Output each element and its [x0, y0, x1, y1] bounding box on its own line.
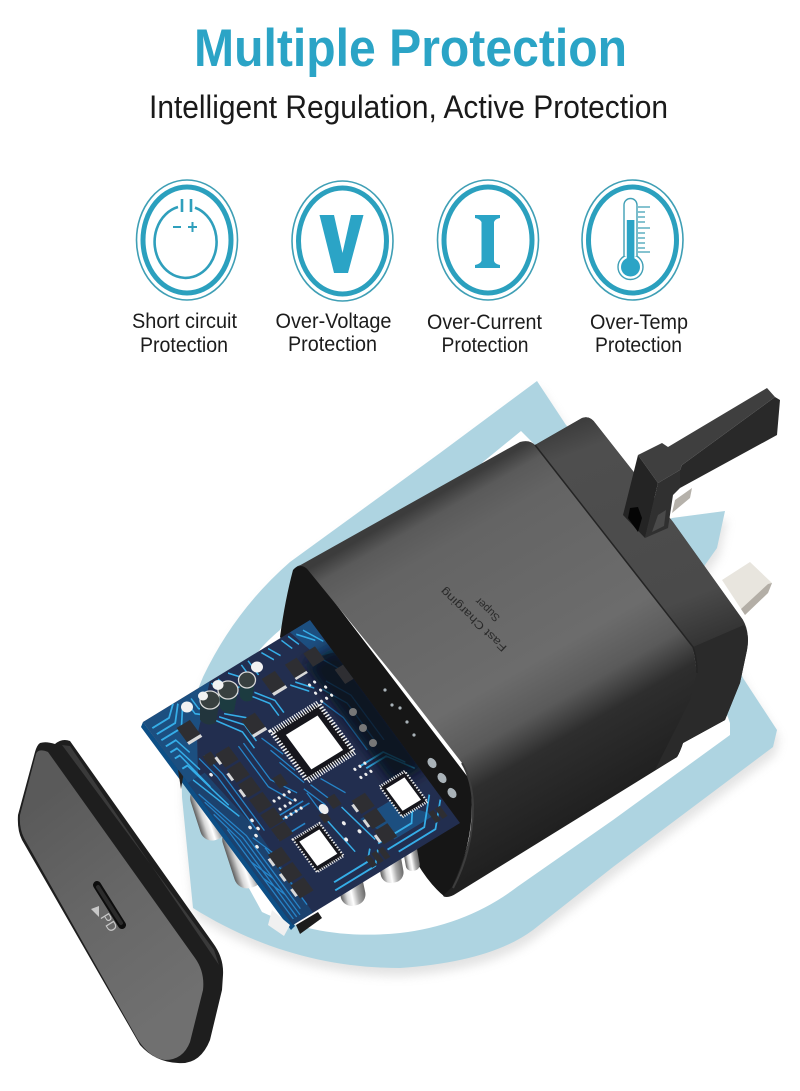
subtitle: Intelligent Regulation, Active Protection	[149, 89, 668, 125]
icon: over-temp thermometer	[582, 180, 683, 300]
icon: over-voltage V	[292, 181, 393, 301]
live pin	[722, 562, 772, 615]
rim highlight	[453, 763, 473, 888]
housing marking: Super	[473, 594, 503, 624]
label: over-current	[427, 311, 542, 357]
main chip	[272, 703, 354, 781]
circuit board	[137, 612, 470, 936]
label: over-voltage: Over-Voltage	[276, 310, 392, 333]
housing marking: Fast Charging	[438, 585, 510, 654]
board clips	[268, 910, 290, 936]
PD mark	[91, 906, 121, 935]
label: short circuit: Protection	[140, 334, 228, 357]
removed cover plate with USB-C port	[18, 740, 223, 1063]
label: short circuit: Short circuit	[132, 310, 237, 333]
label: short circuit	[132, 310, 237, 357]
silver capacitors under the board	[187, 782, 421, 908]
SMD dots	[209, 680, 373, 849]
PD mark: PD	[97, 910, 121, 935]
dark fade into housing	[304, 644, 428, 787]
dim traces	[198, 660, 384, 920]
label: over-temp	[590, 311, 688, 357]
charger housing	[297, 417, 748, 897]
icon: over-current I	[438, 180, 538, 300]
capacitors on the board	[181, 662, 263, 725]
shield background	[182, 381, 779, 976]
base lower section	[655, 625, 748, 770]
silver bars on top components	[187, 670, 382, 897]
base section	[535, 417, 748, 778]
lower chip	[293, 823, 344, 872]
label: over-temp: Protection	[595, 334, 682, 357]
label: over-voltage	[276, 310, 392, 356]
charger interior	[280, 565, 472, 897]
pins on shaded board	[349, 688, 458, 800]
earth pin and shoulder block	[623, 388, 780, 538]
icon: short circuit protection	[136, 180, 238, 300]
label: over-current: Over-Current	[427, 311, 542, 334]
label: over-current: Protection	[442, 334, 528, 357]
USB-C port	[97, 885, 122, 925]
housing marking	[438, 585, 510, 654]
seam	[535, 445, 697, 673]
label: over-temp: Over-Temp	[590, 311, 688, 334]
plug stub pin behind the housing	[672, 488, 692, 513]
mosfet rows	[176, 646, 448, 898]
title: Multiple Protection	[194, 19, 627, 78]
board surface	[137, 612, 470, 931]
main body	[297, 441, 725, 897]
right chip	[380, 771, 427, 817]
highlighted pads	[143, 620, 432, 840]
board edge	[141, 722, 295, 930]
label: over-voltage: Protection	[288, 333, 377, 356]
bright traces	[152, 630, 442, 892]
